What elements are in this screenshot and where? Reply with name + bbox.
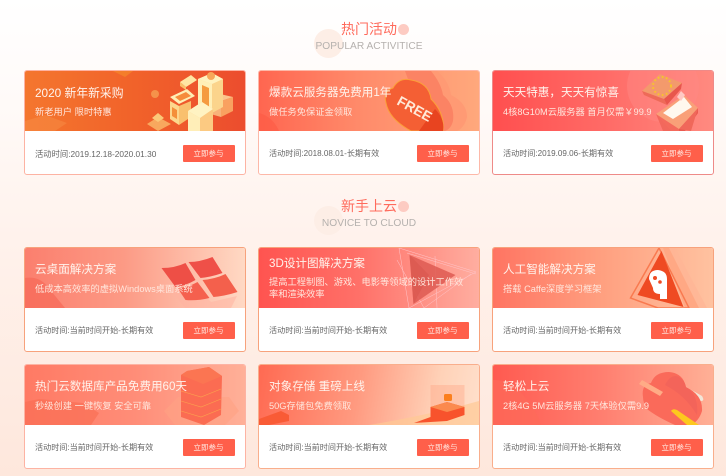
icon: gift box	[627, 71, 698, 131]
banner	[24, 365, 244, 425]
validity and button: 活动时间:2019.09.06-长期有效	[503, 149, 613, 158]
banner	[24, 71, 244, 131]
banner	[258, 248, 478, 308]
heading: novice to cloud: 新手上云	[341, 198, 397, 214]
icon: database cylinder	[25, 367, 238, 425]
icon: free cloud	[262, 71, 467, 131]
icon: 3D triangle wireframe	[396, 248, 476, 308]
banner: 秒级创建 一键恢复 安全可靠	[35, 401, 151, 411]
banner: 2核4G 5M云服务器 7天体验仅需9.9	[503, 401, 649, 411]
banner	[492, 365, 712, 425]
card: AI	[492, 247, 714, 352]
validity and button: 活动时间:当前时间开始-长期有效	[503, 326, 621, 335]
banner: 天天特惠，天天有惊喜	[503, 86, 619, 98]
icon: triangle with head	[630, 248, 699, 308]
banner	[492, 248, 712, 308]
card: 3D design: 立即参与	[428, 326, 458, 335]
banner: 对象存储 重磅上线	[269, 380, 365, 392]
validity and button: 活动时间:当前时间开始-长期有效	[269, 443, 387, 452]
card: 3D design	[258, 247, 480, 352]
card: cloud desktop: 立即参与	[194, 326, 224, 335]
banner: 人工智能解决方案	[503, 262, 596, 276]
card: daily deals: 立即参与	[662, 149, 692, 158]
banner: 50G存储包免费领取	[269, 401, 351, 411]
banner: 4核8G10M云服务器 首月仅需￥99.9	[503, 107, 652, 117]
heading: novice to cloud	[316, 198, 416, 228]
icon: storage box	[259, 385, 479, 425]
card: easy cloud	[492, 364, 714, 469]
card: easy cloud: 立即参与	[662, 443, 692, 452]
heading: hot activities	[314, 21, 422, 58]
card: object storage: 立即参与	[428, 443, 458, 452]
banner: 2020 新年新采购	[35, 86, 124, 100]
validity and button: 活动时间:2018.08.01-长期有效	[269, 149, 379, 158]
banner: 轻松上云	[503, 380, 549, 392]
validity and button: 活动时间:当前时间开始-长期有效	[269, 326, 387, 335]
heading: hot activities: POPULAR ACTIVITICE	[316, 41, 422, 52]
card: new year purchase	[24, 70, 246, 175]
banner: 搭载 Caffe深度学习框架	[503, 284, 602, 294]
card: cloud database	[24, 364, 246, 469]
banner	[258, 71, 478, 131]
card: daily deals	[492, 70, 714, 175]
banner	[24, 248, 244, 308]
validity and button: 活动时间:当前时间开始-长期有效	[35, 443, 153, 452]
card: new year purchase: 立即参与	[194, 149, 224, 158]
validity and button: 活动时间:2019.12.18-2020.01.30	[35, 149, 156, 159]
label: FREE: FREE	[394, 93, 434, 125]
heading: novice to cloud: NOVICE TO CLOUD	[322, 218, 416, 228]
card: free cloud server	[258, 70, 480, 175]
banner: 云桌面解决方案	[35, 262, 116, 276]
banner: 低成本高效率的虚拟Windows桌面系统	[35, 284, 193, 294]
icon: windows tiles	[25, 257, 238, 308]
banner: 3D设计图解决方案	[269, 256, 365, 270]
banner: 做任务免保证金领取	[269, 107, 352, 117]
banner: 新老用户 限时特惠	[35, 107, 112, 117]
banner	[492, 71, 712, 131]
validity and button: 活动时间:当前时间开始-长期有效	[503, 443, 621, 452]
card: cloud database: 立即参与	[194, 443, 224, 452]
card: object storage	[258, 364, 480, 469]
card: cloud desktop	[24, 247, 246, 352]
banner: 热门云数据库产品免费用60天	[35, 380, 187, 392]
banner: 提高工程制图、游戏、电影等领域的设计工作效率和渲染效率	[269, 277, 463, 299]
banner: 爆款云服务器免费用1年	[269, 86, 391, 98]
heading: hot activities: 热门活动	[341, 21, 397, 37]
banner	[258, 365, 478, 425]
icon: isometric buildings	[25, 71, 233, 131]
card: free cloud server: 立即参与	[428, 149, 458, 158]
icon: 3D cloud	[493, 372, 704, 425]
validity and button: 活动时间:当前时间开始-长期有效	[35, 326, 153, 335]
card: AI: 立即参与	[662, 326, 692, 335]
